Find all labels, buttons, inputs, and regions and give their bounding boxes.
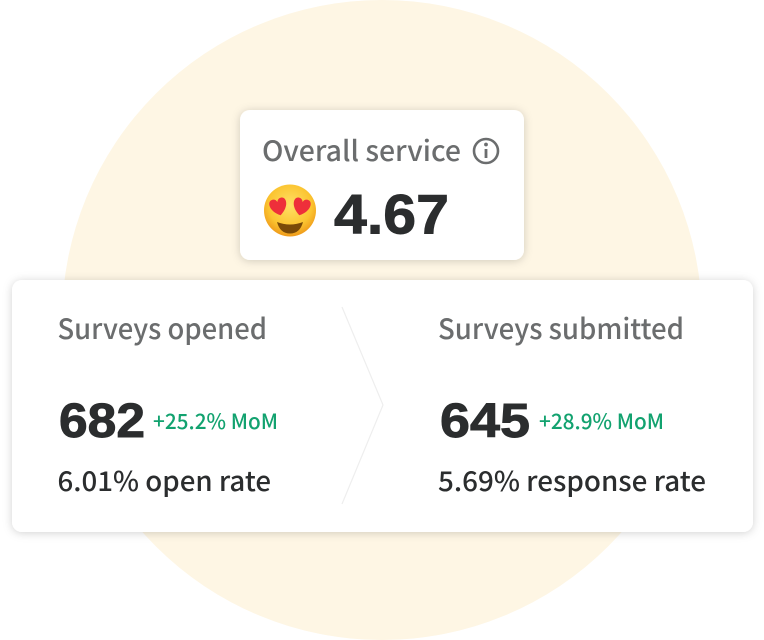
icon: info (474, 139, 498, 163)
change: +28.9% MoM: +28.9% MoM (539, 406, 664, 436)
rate: response rate: 5.69% response rate (438, 460, 706, 499)
rate: open rate: 6.01% open rate (58, 460, 271, 499)
panel: survey funnel (12, 280, 753, 532)
column: surveys submitted (438, 308, 706, 499)
heading: surveys submitted: Surveys submitted (438, 308, 684, 348)
change: +25.2% MoM: +25.2% MoM (153, 406, 278, 436)
column: surveys opened (58, 308, 278, 499)
panel: overall service (240, 110, 524, 260)
icon: heart eyes emoji (264, 184, 316, 236)
value: 4.67: 4.67 (334, 182, 449, 246)
heading: surveys opened: Surveys opened (58, 308, 267, 348)
value: 645: 645 (440, 395, 530, 448)
value: 682: 682 (59, 395, 145, 448)
arrow divider (342, 307, 383, 504)
heading: overall service: Overall service (262, 130, 461, 170)
